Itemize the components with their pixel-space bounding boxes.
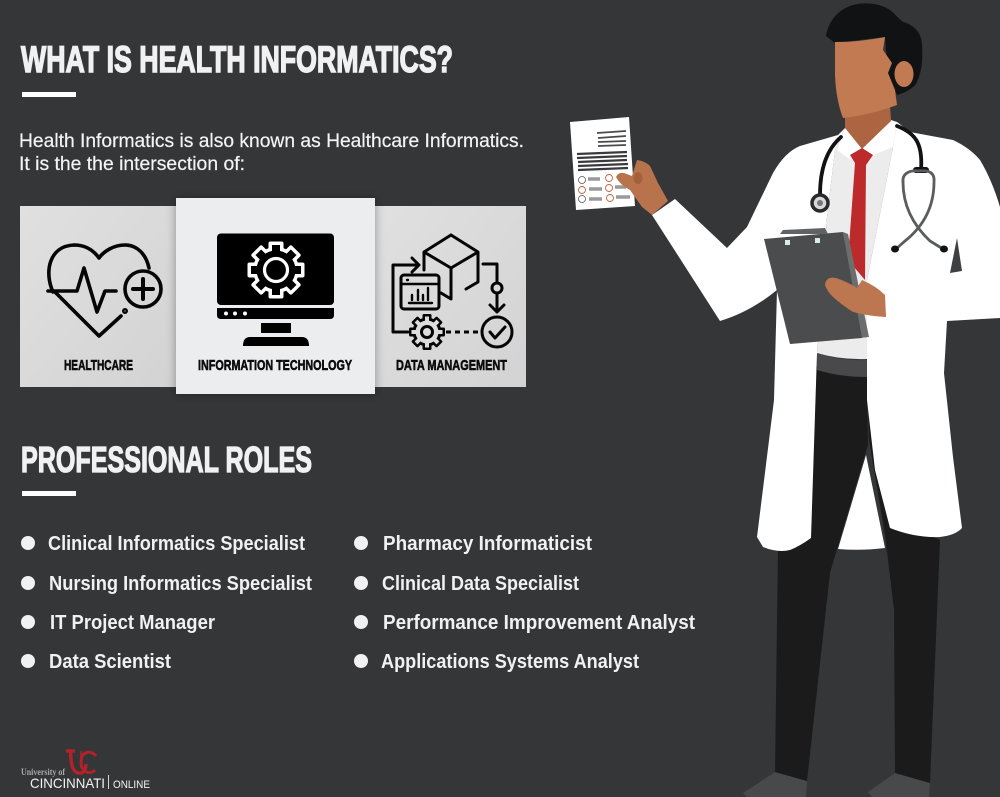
icon: small gear: [409, 314, 445, 350]
heading: professional roles: PROFESSIONAL ROLES: [21, 439, 312, 480]
belt: [817, 353, 867, 377]
face: [835, 37, 897, 118]
stethoscope: [812, 126, 948, 252]
clipboard: [764, 228, 869, 344]
pocket: [950, 238, 962, 273]
label: INFORMATION TECHNOLOGY: [198, 358, 352, 374]
icon: UC mark: [66, 751, 96, 773]
tie: [848, 148, 873, 280]
logo: University of Cincinnati Online: University of: [21, 768, 66, 778]
ear: [894, 61, 914, 87]
shirt collar: [837, 120, 897, 160]
roles list: right column: Performance Improvement Analyst: [383, 612, 695, 634]
roles list: left column: Data Scientist: [49, 651, 171, 673]
panel: data management: [375, 206, 526, 387]
roles list: left column: [21, 533, 312, 673]
upper hand: [616, 160, 668, 215]
panel: healthcare: [20, 206, 176, 387]
shoes: [743, 772, 930, 797]
logo: University of Cincinnati Online: ONLINE: [113, 779, 150, 791]
intro text: It is the the intersection of:: [19, 153, 245, 175]
logo: University of Cincinnati Online: CINCINNATI: [30, 775, 105, 791]
roles list: left column: Nursing Informatics Specialist: [49, 573, 312, 595]
intro text: Health Informatics is also known as Healthcare Informatics.: [19, 130, 524, 152]
icon: data flow: [393, 235, 512, 350]
title: WHAT IS HEALTH INFORMATICS?: [21, 39, 453, 80]
icon: heart with plus: [48, 245, 161, 336]
paper: [570, 117, 635, 210]
shirt: [817, 122, 897, 359]
lower hand: [825, 278, 886, 317]
panel: information technology: [176, 198, 375, 394]
trousers: [775, 360, 940, 783]
logo: University of Cincinnati Online: [21, 751, 150, 791]
roles list: right column: [354, 533, 695, 673]
head: [826, 3, 922, 118]
roles list: left column: IT Project Manager: [50, 612, 215, 634]
roles list: right column: Applications Systems Analyst: [381, 651, 639, 673]
coat back between legs: [838, 455, 885, 550]
coat: [652, 128, 845, 551]
label: HEALTHCARE: [64, 358, 133, 374]
roles list: right column: Clinical Data Specialist: [382, 573, 579, 595]
hair: [826, 3, 922, 95]
neck: [845, 105, 891, 149]
illustration: doctor: [570, 3, 1000, 797]
icon: monitor with gear: [217, 234, 334, 346]
label: DATA MANAGEMENT: [396, 358, 507, 374]
intro text: [19, 130, 524, 175]
roles list: right column: Pharmacy Informaticist: [383, 533, 592, 555]
roles list: left column: Clinical Informatics Specialist: [48, 533, 305, 555]
